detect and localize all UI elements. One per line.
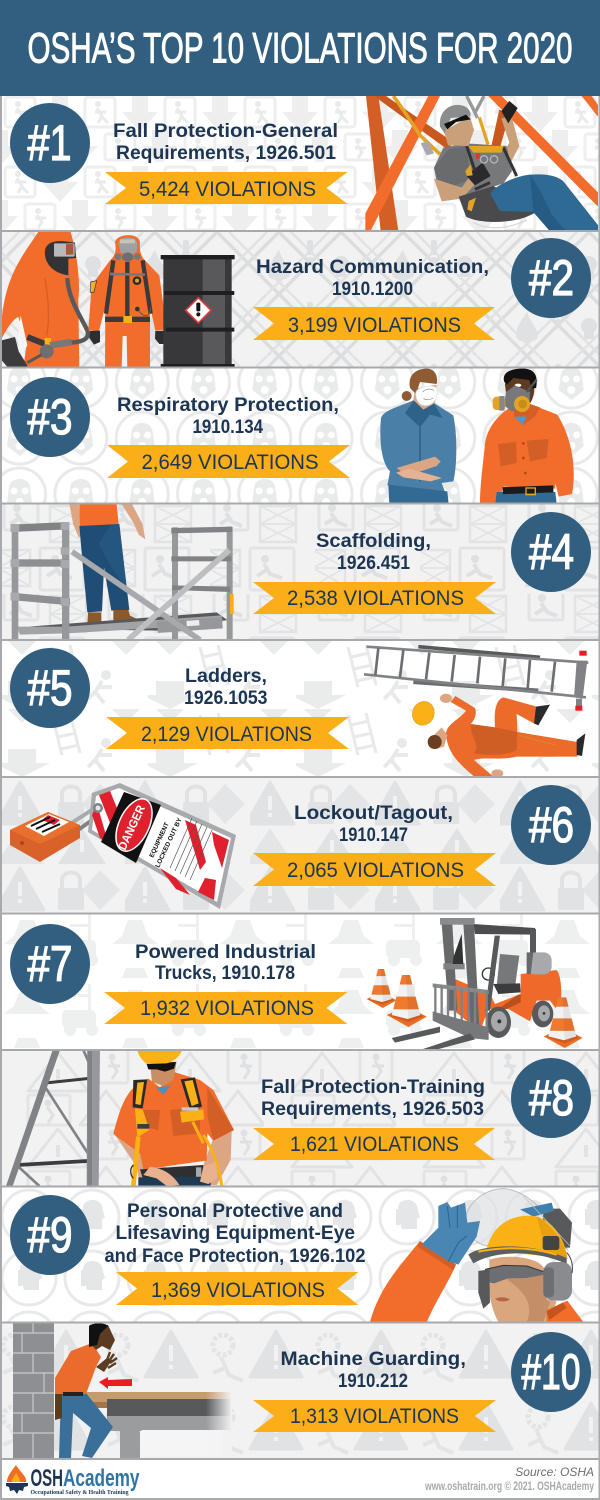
- heading #1: Requirements, 1926.501: [116, 143, 336, 164]
- heading #1: [113, 121, 338, 164]
- heading #8: Fall Protection-Training: [261, 1077, 485, 1098]
- rank badge #1: [10, 103, 90, 183]
- heading #1: Fall Protection-General: [113, 121, 338, 142]
- ribbon: 2,129 violations: 2,129 VIOLATIONS: [141, 723, 312, 746]
- background: triangles and figure signs: [0, 1051, 600, 1187]
- ribbon: 1,369 violations: 1,369 VIOLATIONS: [151, 1279, 325, 1302]
- ribbon: 1,313 violations: 1,313 VIOLATIONS: [290, 1405, 459, 1428]
- rank badge #2: #2: [529, 250, 574, 306]
- background: warning triangles and padlocks: [0, 778, 600, 914]
- rank badge #9: [10, 1195, 90, 1275]
- illustration: worker hanging in harness on orange frame: [365, 96, 600, 232]
- panel: #1 fall protection general: [0, 96, 600, 232]
- rank badge #7: [10, 924, 90, 1004]
- rank badge #10: [511, 1332, 591, 1412]
- heading #9: Personal Protective and: [127, 1201, 343, 1222]
- illustration: hazmat suits and drum: [2, 232, 235, 368]
- logo: OSHAcademy flame and gear: Academy: [63, 1465, 140, 1492]
- heading #5: [184, 666, 268, 709]
- panel: #6 lockout/tagout: [0, 778, 600, 914]
- heading #7: Trucks, 1910.178: [155, 963, 295, 984]
- illustration: worker backing away from machine: [13, 1323, 232, 1459]
- tag equipment text: EQUIPMENT: [148, 821, 171, 859]
- heading #4: [316, 531, 431, 574]
- heading #6: 1910.147: [339, 825, 408, 846]
- rank badge #3: [10, 377, 90, 457]
- background: respirator circles: [0, 368, 600, 504]
- ribbon: 1,621 violations: [253, 1128, 495, 1160]
- ribbon: 1,621 violations: 1,621 VIOLATIONS: [290, 1133, 459, 1156]
- panel: #2 hazard communication: [0, 232, 600, 368]
- illustration: worker with hard hat, face shield and earmuffs: [370, 1189, 583, 1322]
- panel: #9 eye and face protection: [0, 1187, 600, 1323]
- heading #3: 1910.134: [192, 417, 263, 438]
- heading #8: Requirements, 1926.503: [261, 1099, 484, 1120]
- background: scaffolds and falling figures: [0, 504, 600, 640]
- background: warning triangles and hand in gear: [0, 1323, 600, 1460]
- ribbon: 1,932 violations: [104, 992, 348, 1024]
- ribbon: 3,199 violations: 3,199 VIOLATIONS: [288, 314, 461, 337]
- logo: OSHAcademy flame and gear: [6, 1465, 140, 1496]
- illustration: forklift and traffic cones: [367, 918, 583, 1050]
- header banner: [0, 0, 600, 96]
- ribbon: 2,649 violations: [107, 445, 350, 478]
- panel: #10 machine guarding: [0, 1323, 600, 1460]
- ribbon: 5,424 violations: [105, 172, 348, 204]
- heading #6: [294, 803, 453, 846]
- heading #3: Respiratory Protection,: [117, 395, 339, 416]
- illustration: padlock and danger tag: [10, 783, 236, 909]
- panel: #8 fall protection training: [0, 1050, 600, 1187]
- logo: OSHAcademy flame and gear: OSH: [30, 1465, 63, 1492]
- ribbon: 1,369 violations: [116, 1272, 358, 1305]
- panel: #3 respiratory protection: [0, 368, 600, 504]
- panel: #7 powered industrial trucks: [0, 914, 600, 1051]
- rank badge #7: #7: [28, 936, 72, 992]
- illustration: worker fallen under ladder: [364, 647, 588, 777]
- heading #8: [261, 1077, 485, 1120]
- rank badge #6: [511, 785, 591, 865]
- heading #9: [104, 1201, 366, 1267]
- ribbon: 2,538 violations: 2,538 VIOLATIONS: [287, 587, 464, 610]
- background: arrows and falling figures: [0, 96, 600, 231]
- heading #2: Hazard Communication,: [256, 257, 489, 278]
- heading #10: [280, 1349, 466, 1392]
- rank badge #6: #6: [529, 797, 574, 853]
- illustration: woman with dust mask and man with respirator: [380, 369, 574, 504]
- background: hazard diamonds: [0, 232, 600, 368]
- heading #4: Scaffolding,: [316, 531, 431, 552]
- rank badge #8: [511, 1058, 591, 1138]
- heading #10: 1910.212: [338, 1371, 408, 1392]
- danger tag wording: DANGER: [115, 803, 148, 852]
- illustration: tower and worker fitting harness: [6, 1050, 234, 1186]
- heading #5: Ladders,: [185, 666, 267, 687]
- rank badge #9: #9: [28, 1207, 72, 1263]
- heading #6: Lockout/Tagout,: [294, 803, 453, 824]
- rank badge #5: #5: [28, 660, 72, 716]
- ribbon: 5,424 violations: 5,424 VIOLATIONS: [139, 178, 316, 201]
- background: head and vest circles: [0, 1187, 600, 1323]
- rank badge #2: [511, 238, 591, 318]
- panel: #4 scaffolding: [0, 504, 600, 640]
- background: cones and forklifts: [0, 914, 600, 1051]
- ribbon: 2,065 violations: [253, 853, 496, 886]
- source credit: Source: OSHA: [515, 1465, 594, 1479]
- ribbon: 2,129 violations: [106, 717, 349, 749]
- heading #5: 1926.1053: [184, 688, 268, 709]
- ribbon: 2,649 violations: 2,649 VIOLATIONS: [142, 451, 318, 474]
- heading #7: Powered Industrial: [135, 942, 316, 963]
- logo: OSHAcademy flame and gear: Occupational Safety & Health Training: [30, 1489, 129, 1496]
- rank badge #4: [511, 512, 591, 592]
- tag equipment text: LOCKED OUT BY: [154, 816, 184, 869]
- heading #7: [135, 942, 316, 984]
- heading #3: [117, 395, 339, 438]
- panel: #5 ladders: [0, 641, 600, 778]
- ribbon: 2,538 violations: [253, 582, 496, 614]
- heading #4: 1926.451: [337, 553, 410, 574]
- rank badge #4: #4: [529, 524, 574, 580]
- rank badge #5: [10, 648, 90, 728]
- footer: [0, 1460, 600, 1500]
- ribbon: 1,932 violations: 1,932 VIOLATIONS: [140, 997, 314, 1020]
- rank badge #8: #8: [529, 1070, 574, 1126]
- ribbon: 1,313 violations: [253, 1400, 496, 1432]
- background: arrows, ladders and falling figures: [0, 641, 600, 778]
- heading #10: Machine Guarding,: [280, 1349, 466, 1370]
- heading #9: Lifesaving Equipment-Eye: [116, 1223, 355, 1244]
- heading #2: 1910.1200: [332, 279, 413, 300]
- illustration: worker standing on scaffold: [11, 504, 234, 640]
- rank badge #1: #1: [28, 115, 72, 171]
- ribbon: 2,065 violations: 2,065 VIOLATIONS: [287, 859, 464, 882]
- rank badge #3: #3: [28, 389, 72, 445]
- heading #2: [256, 257, 489, 300]
- ribbon: 3,199 violations: [253, 307, 495, 340]
- heading #9: and Face Protection, 1926.102: [104, 1246, 366, 1267]
